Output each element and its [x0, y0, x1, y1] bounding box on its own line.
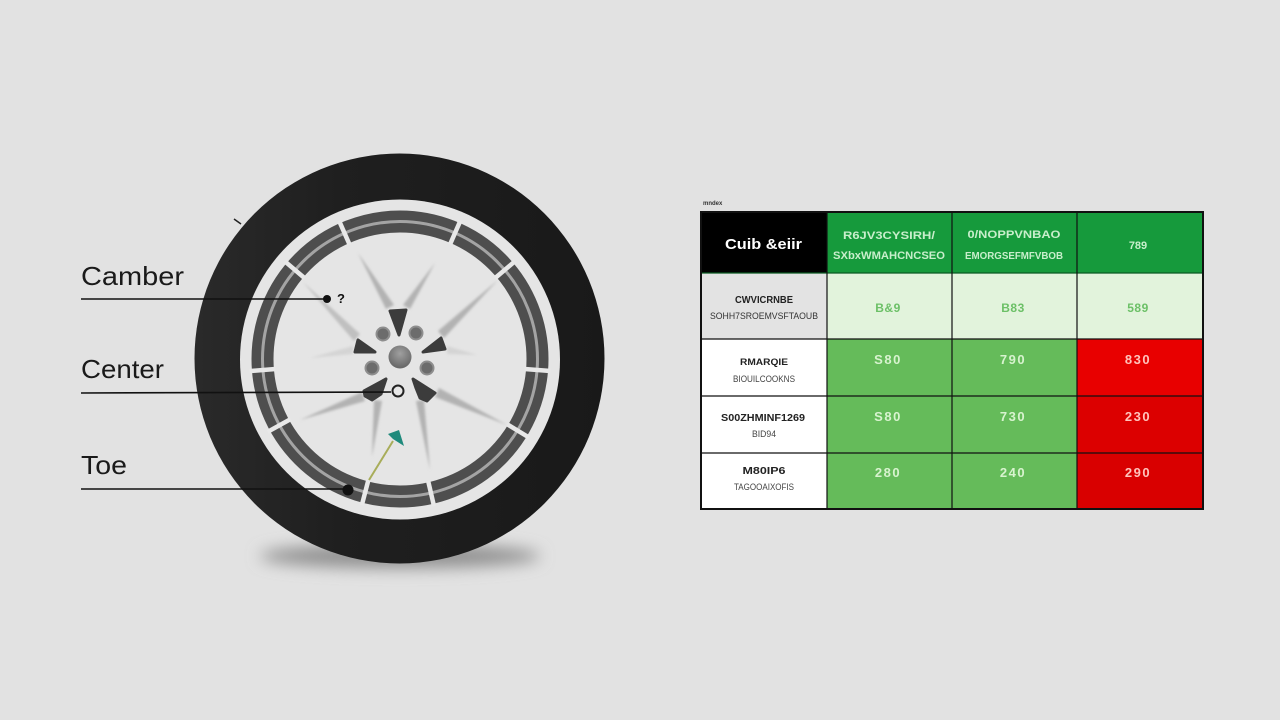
row 1: SOHH7SROEMVSFTAOUB: [710, 311, 818, 321]
row 3: [701, 396, 1203, 453]
table grid: [701, 212, 1203, 509]
table caption: mndex: [703, 201, 723, 207]
header row: EMORGSEFMFVBOB: [965, 251, 1063, 262]
camber label: [81, 261, 345, 306]
row 1: 589: [1127, 301, 1149, 315]
center label: Center: [81, 354, 164, 384]
rim face: [240, 200, 560, 520]
row 2: S80: [874, 352, 902, 367]
row 1: B&9: [875, 301, 901, 315]
wheel diagram: [194, 154, 604, 568]
row 4: 240: [1000, 465, 1026, 480]
spokes: [300, 253, 507, 470]
row 3: 230: [1125, 409, 1151, 424]
row 4: M80IP6: [742, 466, 786, 477]
row 4: TAGOOAIXOFIS: [734, 482, 794, 492]
tire: [194, 154, 604, 564]
row 1: [701, 273, 1203, 339]
toe arrow: [369, 430, 404, 480]
row 2: [701, 339, 1203, 396]
rim ring segments: [250, 221, 550, 506]
header row: Cuib &eiir: [725, 236, 802, 253]
camber label: ?: [337, 291, 345, 306]
row 4: [701, 453, 1203, 509]
header row: 789: [1129, 240, 1147, 252]
row 4: 280: [875, 465, 901, 480]
header row: R6JV3CYSIRH/: [843, 230, 935, 242]
row 1: B83: [1001, 301, 1025, 315]
row 3: S00ZHMINF1269: [721, 413, 805, 424]
header row: [701, 212, 1203, 273]
center label: [81, 354, 404, 396]
toe label: [81, 450, 354, 496]
row 2: 830: [1125, 352, 1151, 367]
toe label: Toe: [81, 450, 127, 480]
spoke wedges: [355, 310, 445, 401]
row 2: 790: [1000, 352, 1026, 367]
row 2: BIOUILCOOKNS: [733, 374, 795, 384]
row 4: 290: [1125, 465, 1151, 480]
header row: SXbxWMAHCNCSEO: [833, 250, 945, 262]
hub: [388, 346, 412, 368]
header row: 0/NOPPVNBAO: [968, 229, 1061, 241]
tick mark: [234, 219, 241, 224]
row 3: S80: [874, 409, 902, 424]
row 3: BID94: [752, 429, 776, 439]
ground shadow: [260, 544, 540, 568]
comparison table: [701, 212, 1203, 509]
lug bolts: [366, 326, 434, 374]
camber label: Camber: [81, 261, 184, 291]
row 2: RMARQIE: [740, 357, 788, 367]
row 1: CWVICRNBE: [735, 295, 793, 306]
row 3: 730: [1000, 409, 1026, 424]
